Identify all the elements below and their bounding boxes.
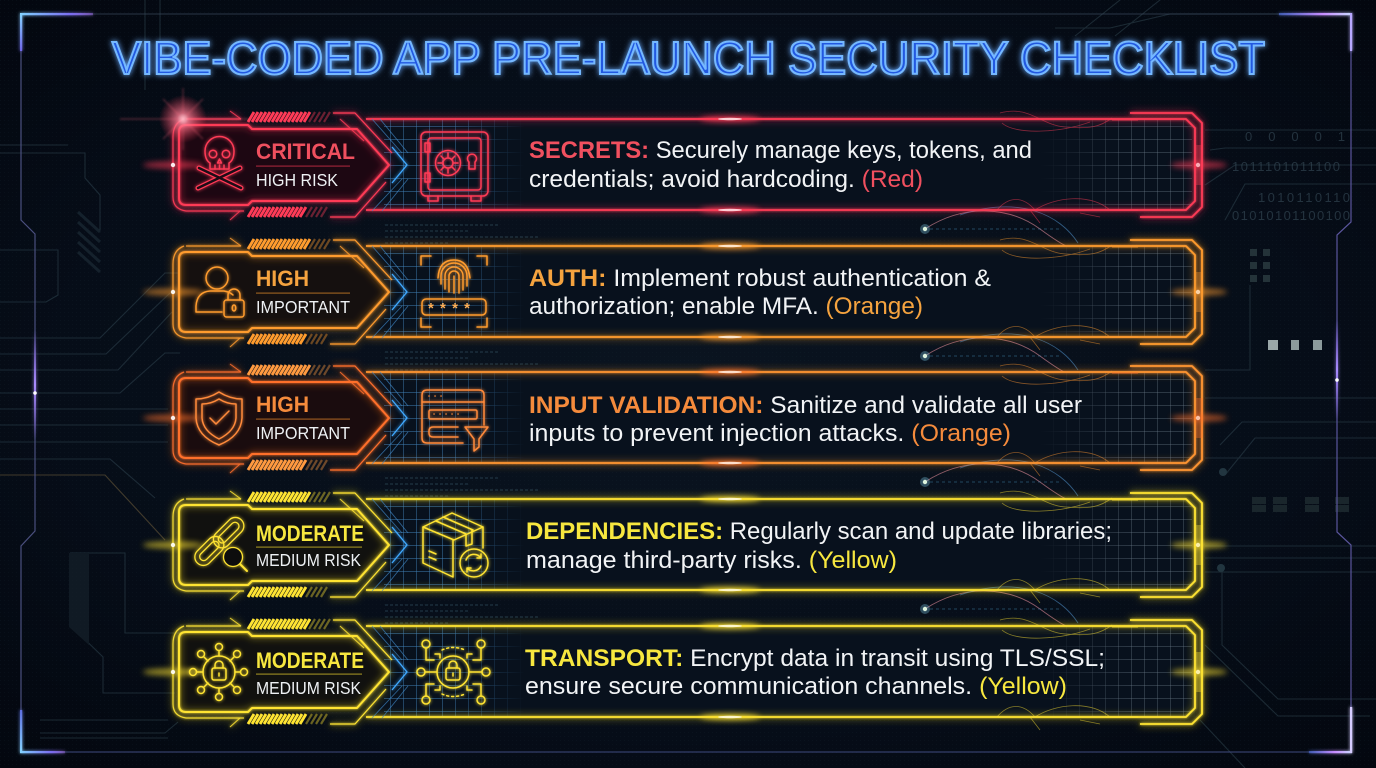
sublabel: high risk: HIGH RISK [256, 170, 338, 190]
flares [143, 369, 1227, 466]
badge divider [256, 546, 362, 548]
password asterisks: **** [428, 300, 470, 317]
icon: skull and crossbones [198, 136, 241, 188]
badge [173, 618, 408, 727]
badge divider [256, 292, 350, 294]
row background and grids [366, 119, 1195, 249]
long neon frame [366, 366, 1202, 470]
badge [173, 111, 408, 220]
text: transport line 2: ensure secure communication channels. (Yellow) [525, 673, 1067, 700]
icon: safe [421, 132, 488, 201]
status squares [1250, 249, 1349, 512]
flares [143, 116, 1227, 213]
icon: chain with magnifier [191, 514, 247, 571]
binary data decoration: 01010101100100 [1232, 208, 1350, 223]
icon: network hub with padlock [190, 644, 248, 700]
long neon frame [366, 240, 1202, 344]
title: VIBE-CODED APP PRE-LAUNCH SECURITY CHECKLIST [112, 32, 1265, 84]
icon: input form with filter [422, 390, 488, 451]
row background and grids [366, 626, 1195, 717]
long neon frame [366, 113, 1202, 217]
long neon frame [366, 493, 1202, 597]
sublabel: important: IMPORTANT [256, 423, 350, 443]
badge [173, 364, 408, 473]
binary data decoration: 1010110110 [1258, 190, 1350, 205]
long neon frame [366, 620, 1202, 724]
icon: circuit padlock [417, 640, 490, 704]
panel: secrets row [143, 111, 1227, 249]
text: secrets line 2: credentials; avoid hardcoding. (Red) [529, 166, 923, 193]
binary data decoration: 1011101011100 [1232, 159, 1340, 174]
binary data decoration: 0 0 0 0 1 [1245, 129, 1345, 144]
row background and grids [366, 246, 1195, 376]
text: input validation line 2: inputs to prevent injection attacks. (Orange) [529, 420, 1011, 447]
flares [143, 623, 1227, 720]
text: transport: TRANSPORT: Encrypt data in transit using TLS/SSL; [525, 645, 1105, 672]
row background and grids [366, 372, 1195, 502]
panel: input validation row [143, 364, 1227, 502]
panel: transport row [143, 618, 1227, 730]
panel: auth row [143, 238, 1227, 376]
badge divider [256, 674, 362, 675]
text: dependencies: DEPENDENCIES: Regularly scan and update libraries; [526, 518, 1112, 545]
label: critical: CRITICAL [256, 139, 355, 164]
star flare [120, 88, 250, 150]
squiggles [997, 364, 1112, 476]
row background and grids [366, 499, 1195, 629]
badge divider [256, 166, 350, 167]
sublabel: medium risk: MEDIUM RISK [256, 678, 361, 698]
flares [143, 243, 1227, 340]
circuit traces: right [1055, 0, 1376, 768]
sublabel: important: IMPORTANT [256, 297, 350, 317]
squiggles [997, 618, 1112, 730]
flares [143, 496, 1227, 593]
icon: package with refresh [423, 513, 488, 577]
panel: dependencies row [143, 491, 1227, 629]
icon: shield check [196, 392, 242, 445]
text: secrets: SECRETS: Securely manage keys, tokens, and [529, 137, 1032, 164]
icon: user with padlock [196, 267, 244, 317]
circuit traces: left [0, 0, 180, 738]
sublabel: medium risk: MEDIUM RISK [256, 550, 361, 570]
binary data decoration [1232, 129, 1350, 223]
icon: fingerprint login [421, 256, 487, 327]
text: auth line 2: authorization; enable MFA. (Orange) [529, 293, 923, 320]
text: auth: AUTH: Implement robust authentication & [529, 265, 991, 292]
badge [173, 238, 408, 347]
badge [173, 491, 408, 600]
label: high: HIGH [256, 392, 309, 417]
label: high: HIGH [256, 266, 309, 291]
text: dependencies line 2: manage third-party risks. (Yellow) [526, 547, 897, 574]
badge divider [256, 418, 350, 420]
squiggles [997, 111, 1112, 223]
text: input validation: INPUT VALIDATION: Sanitize and validate all user [529, 392, 1082, 419]
squiggles [997, 238, 1112, 350]
label: moderate: MODERATE [256, 648, 364, 673]
label: moderate: MODERATE [256, 521, 364, 546]
squiggles [997, 491, 1112, 603]
